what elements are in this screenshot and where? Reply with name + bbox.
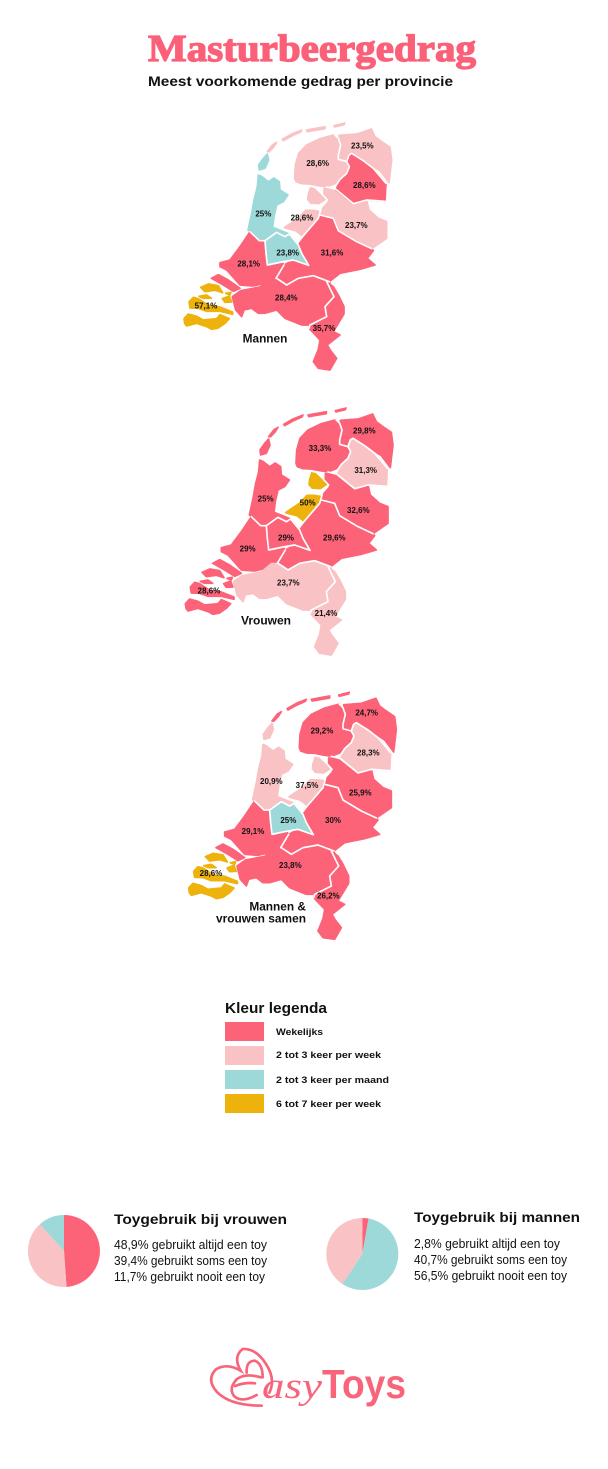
text block: toygebruik vrouwen: Toygebruik bij vrouwen [114,1211,287,1227]
map: mannen [184,123,392,370]
map: mannen en vrouwen samen: 28,3% [357,748,380,757]
map: mannen en vrouwen samen: 26,2% [317,892,340,901]
logo: EasyToys: Toys [322,1361,406,1407]
legend item: 6 tot 7 keer per week [225,1094,382,1113]
text block: toygebruik vrouwen: 39,4% gebruikt soms een toy [114,1254,268,1268]
legend item: 2 tot 3 keer per week: 2 tot 3 keer per week [276,1050,382,1060]
map: vrouwen: 29,6% [323,533,346,542]
legend [225,1001,389,1113]
text block: toygebruik mannen: 2,8% gebruikt altijd een toy [414,1237,561,1251]
map: mannen en vrouwen samen: vrouwen samen [216,912,306,926]
map: mannen: 23,7% [345,221,368,230]
map: mannen: 23,8% [276,248,299,257]
subtitle: Meest voorkomende gedrag per provincie [148,73,453,89]
pie chart: mannen [326,1218,398,1290]
legend item: 6 tot 7 keer per week: 6 tot 7 keer per week [276,1099,382,1109]
legend item: 2 tot 3 keer per maand [225,1070,389,1089]
map: mannen: 35,7% [313,324,335,333]
legend title: Kleur legenda [225,1001,328,1017]
map: vrouwen: 33,3% [309,444,331,453]
map: mannen: 28,1% [237,260,260,269]
map: mannen: 28,6% [306,159,329,168]
map: mannen: 28,6% [291,214,313,223]
text block: toygebruik vrouwen: 48,9% gebruikt altijd een toy [114,1238,268,1252]
map: vrouwen [185,408,393,655]
map: mannen: 28,6% [353,181,376,190]
map: mannen: 25% [255,209,271,218]
map: vrouwen: Vrouwen [241,614,291,628]
text block: toygebruik mannen: 40,7% gebruikt soms een toy [414,1253,568,1267]
map: vrouwen: 21,4% [315,609,337,618]
map: vrouwen: 25% [258,494,274,503]
map: vrouwen: 28,6% [198,587,220,596]
map: mannen: 57,1% [195,302,217,311]
map: mannen: 28,4% [275,294,298,303]
map: mannen en vrouwen samen: 25% [280,816,296,825]
map: vrouwen: 29% [240,545,256,554]
logo: EasyToys [211,1349,406,1407]
text block: toygebruik vrouwen [114,1211,287,1284]
text block: toygebruik mannen: 56,5% gebruikt nooit een toy [414,1269,568,1283]
icon: heart swirl [211,1349,272,1406]
text block: toygebruik mannen [414,1209,580,1283]
map: vrouwen: 29,8% [353,426,376,435]
map: mannen en vrouwen samen: 25,9% [349,788,372,797]
map: mannen en vrouwen samen: 29,1% [242,827,264,836]
map: mannen en vrouwen samen: 23,8% [279,861,302,870]
map: vrouwen: 29% [278,533,294,542]
map: vrouwen: 32,6% [347,506,370,515]
map: mannen: Mannen [243,332,287,346]
map: vrouwen: 31,3% [354,466,377,475]
logo: EasyToys: asy [262,1366,323,1407]
map: mannen: 31,6% [321,248,343,257]
map: mannen en vrouwen samen: 20,9% [260,777,283,786]
map: mannen en vrouwen samen: 28,6% [200,869,222,878]
map: mannen en vrouwen samen [189,692,396,939]
map: vrouwen: 23,7% [277,579,300,588]
map: mannen en vrouwen samen: 24,7% [355,709,378,718]
map: mannen en vrouwen samen: 29,2% [311,726,333,735]
legend item: 2 tot 3 keer per week [225,1046,382,1065]
legend item: 2 tot 3 keer per maand: 2 tot 3 keer per maand [276,1075,389,1085]
map: mannen: 23,5% [351,141,374,150]
legend item: wekelijks: Wekelijks [276,1027,323,1037]
title: Masturbeergedrag [148,28,476,70]
map: vrouwen: 50% [300,499,316,508]
map: mannen en vrouwen samen: 37,5% [296,781,318,790]
legend item: wekelijks [225,1022,323,1041]
text block: toygebruik vrouwen: 11,7% gebruikt nooit een toy [114,1270,266,1284]
pie chart: vrouwen [28,1215,100,1287]
map: mannen en vrouwen samen: Mannen & [249,899,306,913]
map: mannen en vrouwen samen: 30% [325,816,341,825]
text block: toygebruik mannen: Toygebruik bij mannen [414,1209,580,1225]
